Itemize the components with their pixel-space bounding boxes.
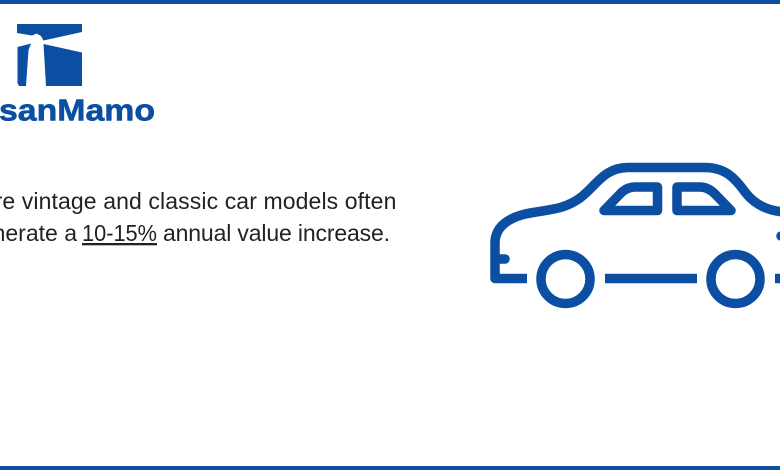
bottom border xyxy=(0,466,780,470)
front wheel xyxy=(541,254,590,304)
front window xyxy=(604,187,658,210)
underbody bar xyxy=(605,274,697,283)
car body outline xyxy=(495,168,780,278)
icon: lighthouse xyxy=(17,24,82,86)
text block: car value statement xyxy=(0,188,396,246)
icon: car xyxy=(495,168,780,304)
logo wordmark: sanMamo xyxy=(0,92,155,128)
top border xyxy=(0,0,780,4)
rear wheel xyxy=(711,254,760,304)
logo xyxy=(0,24,155,128)
highlighted figure: 10-15% xyxy=(82,220,157,246)
rear underbody stub xyxy=(775,274,780,283)
headlight xyxy=(499,254,505,264)
text line 2 xyxy=(0,220,390,246)
text segment: annual value increase: annual value increase. xyxy=(163,220,390,246)
rear window xyxy=(677,187,731,210)
